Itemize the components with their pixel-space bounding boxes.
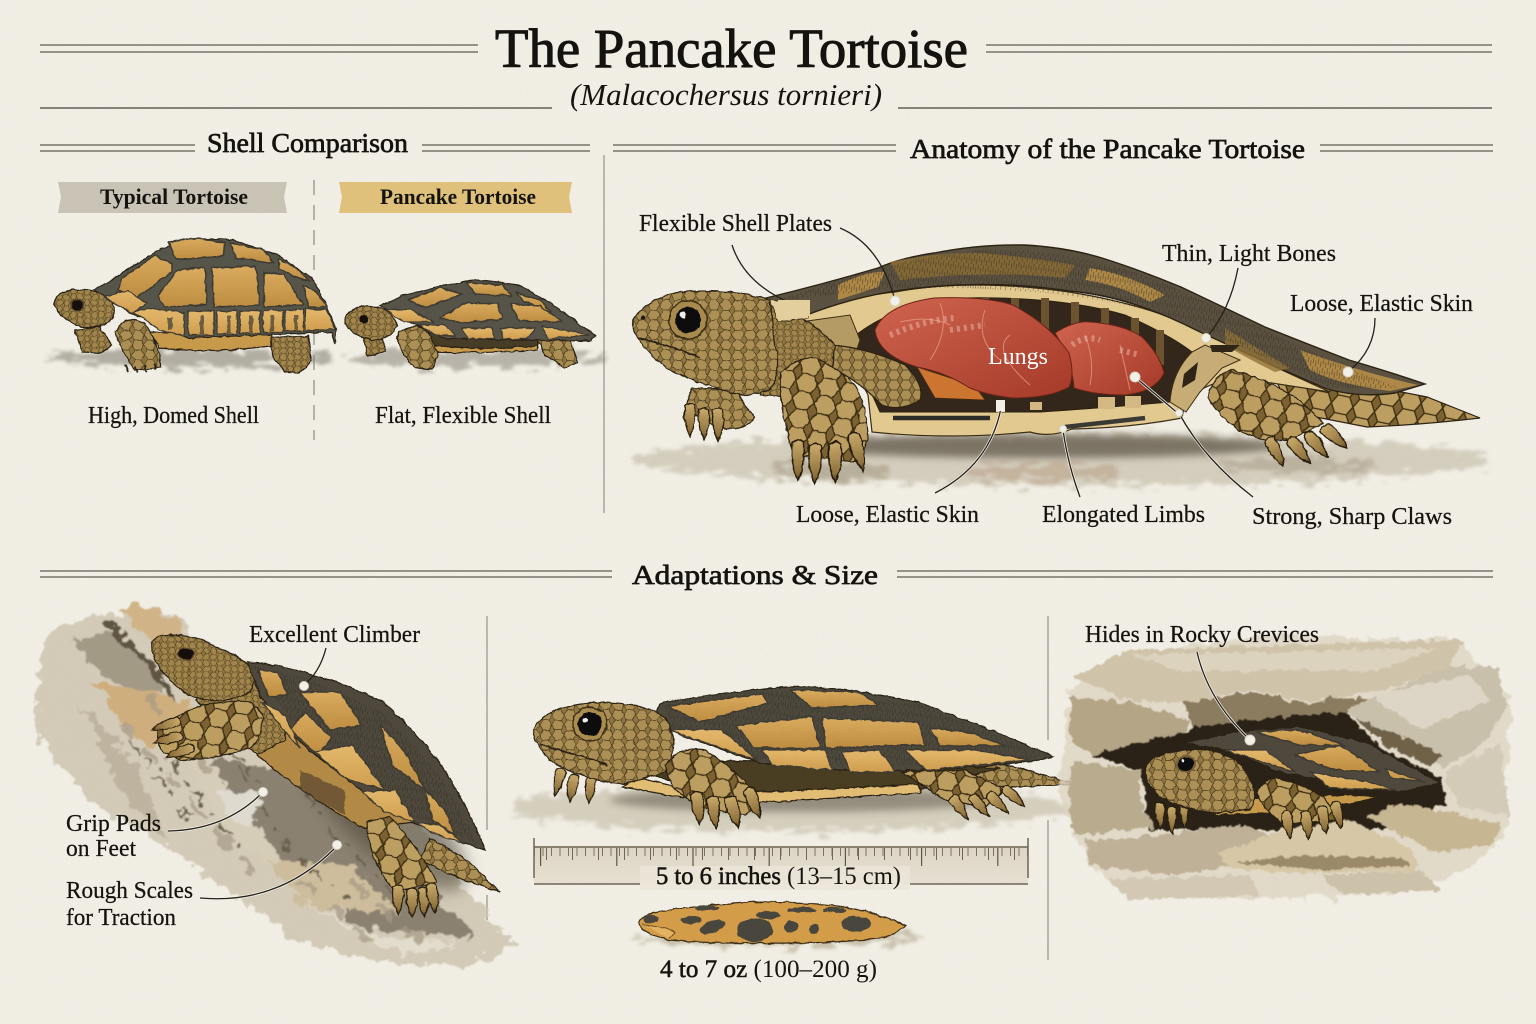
scene: rocky crevice <box>1060 622 1510 900</box>
climbing tortoise <box>150 635 500 918</box>
callout: rough scales for traction <box>66 840 342 931</box>
divider: dashed <box>313 180 315 440</box>
callout: loose elastic skin upper: Loose, Elastic Skin <box>1290 291 1473 317</box>
tail <box>1270 366 1480 427</box>
subtitle: scientific name: (Malacochersus tornieri) <box>570 77 882 112</box>
rocks <box>1060 636 1510 898</box>
callout: thin light bones <box>1162 241 1336 342</box>
rear leg with claws <box>1208 370 1351 469</box>
heading: shell comparison: Shell Comparison <box>207 128 409 158</box>
illustration: pancake tortoise <box>345 280 608 370</box>
callout: loose elastic skin lower <box>796 400 1005 528</box>
scene: size tortoise and ruler <box>510 687 1078 983</box>
callout: flexible shell plates <box>639 211 900 316</box>
hiding tortoise <box>1145 727 1440 840</box>
callout: flexible shell plates: Flexible Shell Plates <box>639 211 832 237</box>
far foot <box>685 388 755 442</box>
callout: excellent climber: Excellent Climber <box>249 622 420 648</box>
lungs <box>875 298 1164 398</box>
callout: rough scales for traction: Rough Scales <box>66 878 193 904</box>
callout: grip pads on feet: Grip Pads <box>66 811 161 837</box>
callout: strong sharp claws: Strong, Sharp Claws <box>1252 504 1452 530</box>
weight label: 4 to 7 oz (100–200 g) <box>660 956 877 983</box>
callout: loose elastic skin upper <box>1290 291 1473 377</box>
ribbon: pancake tortoise: Pancake Tortoise <box>380 184 536 209</box>
caption: high domed shell: High, Domed Shell <box>88 403 259 429</box>
callout: hides in rocky crevices <box>1085 622 1319 745</box>
ribbon: pancake tortoise <box>339 182 572 213</box>
heading: anatomy: Anatomy of the Pancake Tortoise <box>910 134 1305 164</box>
size tortoise <box>510 687 1078 832</box>
orange gill strip <box>917 367 985 400</box>
caption: flat flexible shell: Flat, Flexible Shell <box>375 403 551 429</box>
plastron <box>893 396 1145 427</box>
front leg with claws <box>780 358 870 484</box>
callout: elongated limbs: Elongated Limbs <box>1042 502 1205 528</box>
callout: grip pads on feet: on Feet <box>66 836 136 862</box>
head and neck <box>632 291 835 400</box>
panel: adaptations and size <box>37 560 1510 983</box>
callout: rough scales for traction: for Traction <box>66 905 176 931</box>
panel: shell comparison <box>45 128 608 440</box>
callout: strong sharp claws <box>1130 372 1452 530</box>
callout: elongated limbs <box>1042 426 1205 528</box>
label: lungs: Lungs <box>988 344 1048 370</box>
callout: excellent climber <box>249 622 420 690</box>
upper arm <box>815 345 921 408</box>
callout: grip pads on feet <box>66 788 268 862</box>
title: The Pancake Tortoise <box>495 18 968 79</box>
callout: hides in rocky crevices: Hides in Rocky Crevices <box>1085 622 1319 648</box>
ribbon: typical tortoise <box>58 182 287 213</box>
illustration: typical tortoise <box>45 238 336 373</box>
body cavity with ribs <box>800 298 1240 412</box>
size label: 5 to 6 inches (13–15 cm) <box>656 863 901 890</box>
panel: anatomy <box>630 134 1490 530</box>
ruler <box>534 838 1028 890</box>
callout: thin light bones: Thin, Light Bones <box>1162 241 1336 267</box>
callout: loose elastic skin lower: Loose, Elastic Skin <box>796 502 979 528</box>
heading: adaptations: Adaptations & Size <box>632 560 878 590</box>
scene: climbing on rock <box>37 605 520 965</box>
flat shell profile <box>630 902 930 946</box>
rock slope <box>37 605 520 965</box>
ground shadow <box>630 434 1490 486</box>
carapace cut-away <box>766 245 1425 436</box>
ribbon: typical tortoise: Typical Tortoise <box>100 184 248 209</box>
